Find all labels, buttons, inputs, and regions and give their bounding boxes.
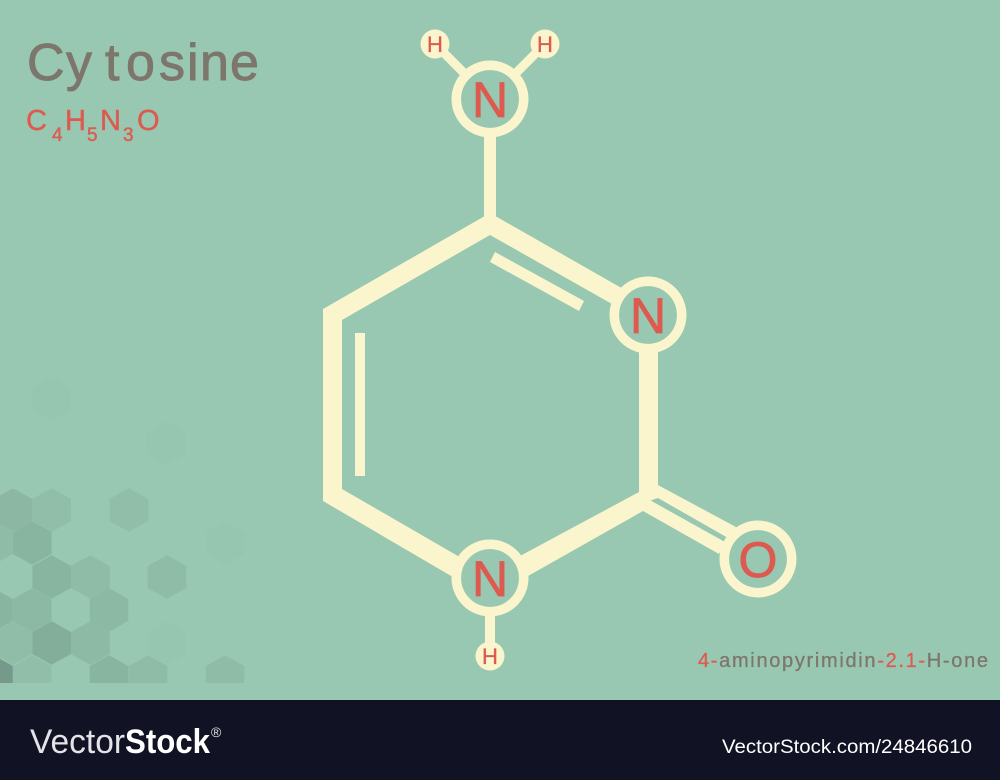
VectorStock logo: ® — [211, 724, 222, 740]
ring bonds — [323, 213, 625, 580]
VectorStock logo — [30, 723, 222, 761]
atom: N ring bottom: N — [472, 551, 508, 607]
atom: H left — [420, 30, 450, 58]
atom: N ring right — [614, 281, 682, 349]
atom: H right — [530, 30, 560, 58]
atom: N amino — [456, 65, 524, 133]
image id: VectorStock.com/24846610 — [722, 737, 972, 758]
footer bar — [0, 700, 1000, 780]
bonds: amino hydrogens — [435, 44, 545, 656]
formula: 3 — [123, 125, 134, 146]
hexagon pattern — [0, 488, 244, 683]
formula: C — [26, 105, 47, 137]
formula: O — [137, 105, 160, 137]
formula: N — [100, 105, 121, 137]
formula: 5 — [87, 125, 98, 146]
formula: 4 — [52, 125, 63, 146]
IUPAC name: 4-aminopyrimidin-2.1-H-one — [698, 650, 988, 672]
inner double bonds — [355, 252, 584, 476]
atom: H bottom — [476, 642, 504, 670]
formula — [26, 105, 160, 146]
VectorStock logo: Stock — [125, 723, 210, 761]
atom: N ring right: N — [630, 288, 666, 344]
title: Cytosine — [27, 34, 259, 92]
atom: H left: H — [427, 32, 443, 57]
atom: H bottom: H — [482, 644, 498, 669]
atom: O carbonyl: O — [739, 532, 777, 588]
atom: O carbonyl — [724, 525, 792, 593]
molecule: cytosine structure — [323, 30, 792, 670]
bond: amino N to ring — [484, 99, 496, 219]
carbonyl double bond — [643, 484, 736, 554]
atom: N ring bottom — [456, 544, 524, 612]
formula: H — [65, 105, 86, 137]
atom: H right: H — [537, 32, 553, 57]
VectorStock logo: Vector — [30, 723, 125, 761]
atom: N amino: N — [472, 72, 508, 128]
